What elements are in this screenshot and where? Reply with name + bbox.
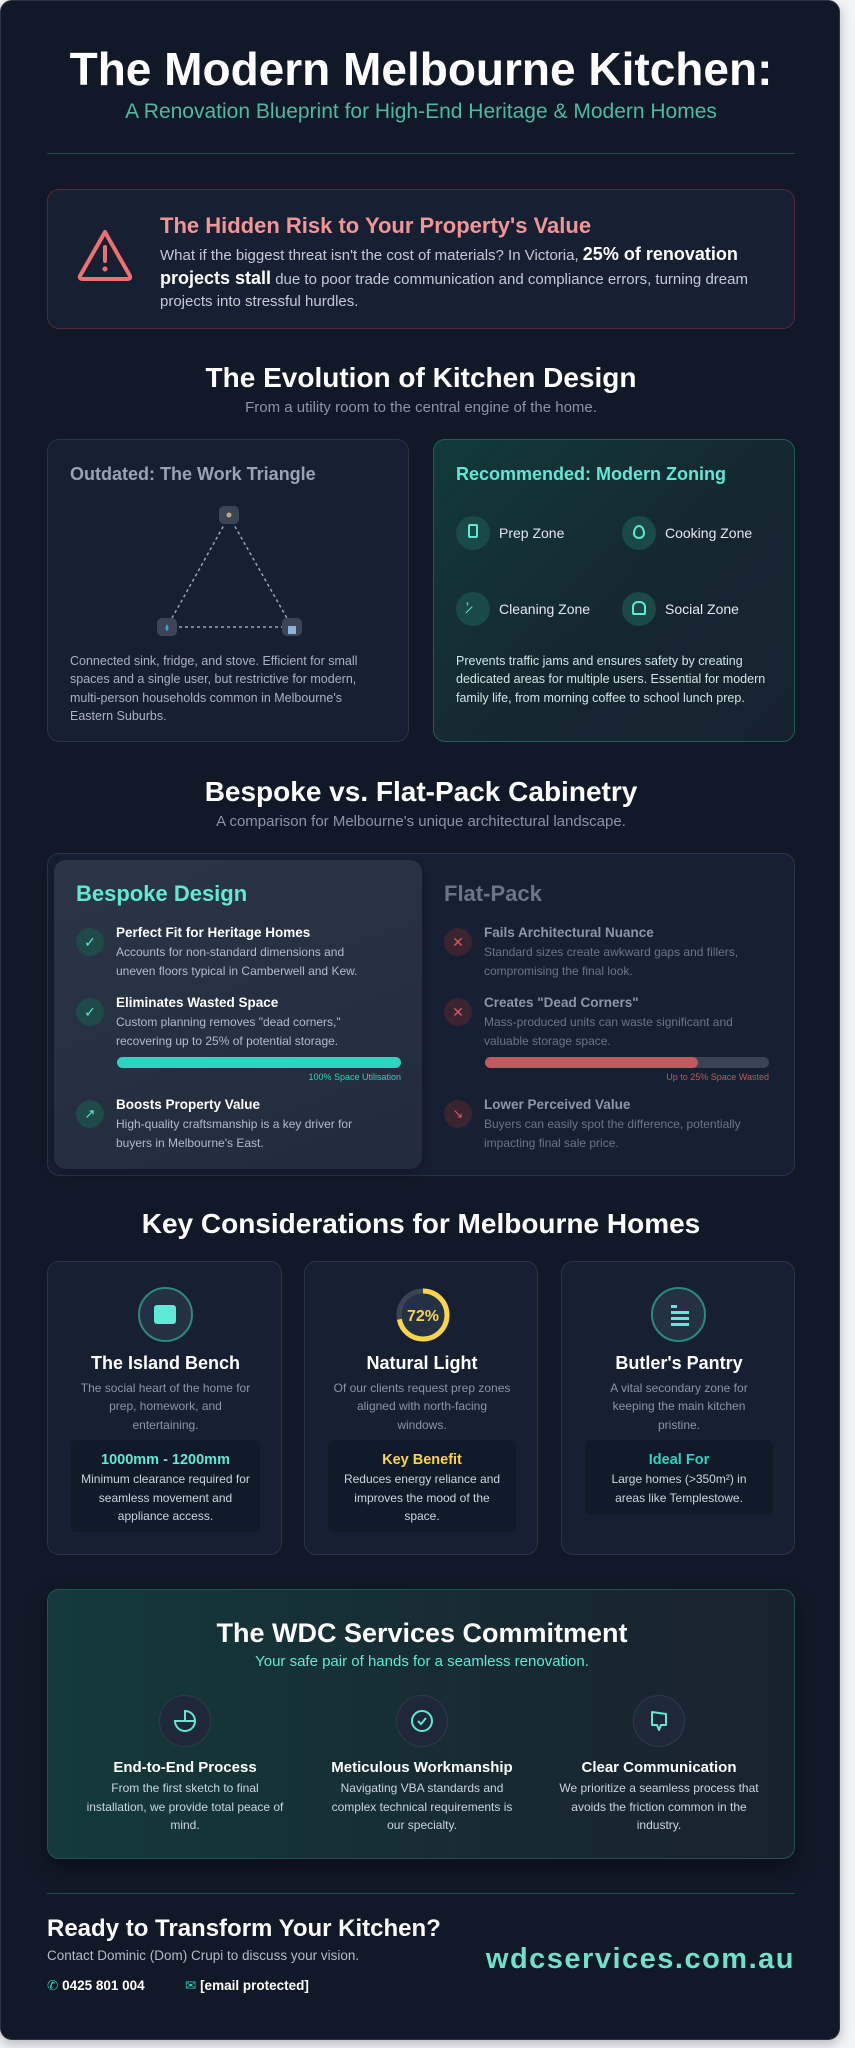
- item: boosts value: ↗: [85, 1106, 95, 1121]
- stat box: [71, 1440, 260, 1532]
- pillar: end-to-end: From the first sketch to final installation, we provide total peace of mind.: [87, 1781, 283, 1832]
- description: The social heart of the home for prep, homework, and entertaining.: [81, 1381, 250, 1432]
- risk heading: The Hidden Risk to Your Property's Value: [160, 213, 591, 238]
- item: eliminates wasted space: [76, 995, 401, 1082]
- item: dead corners: Mass-produced units can waste significant and valuable storage space.: [484, 1015, 733, 1048]
- donut: 72%: [396, 1288, 450, 1342]
- zoning heading: Recommended: Modern Zoning: [456, 464, 726, 484]
- triangle diagram: [157, 506, 302, 636]
- subtitle: A Renovation Blueprint for High-End Heritage & Modern Homes: [125, 100, 717, 123]
- stat box: 1000mm - 1200mm: [101, 1452, 230, 1468]
- item: eliminates wasted space: Eliminates Wasted Space: [116, 995, 278, 1010]
- benefit box: Key Benefit: [382, 1452, 462, 1468]
- item: boosts value: Boosts Property Value: [116, 1097, 260, 1112]
- icon: pantry: [651, 1287, 706, 1342]
- heading: key considerations: Key Considerations for Melbourne Homes: [142, 1208, 700, 1239]
- item: lower value: [444, 1097, 741, 1150]
- item: perfect fit: Perfect Fit for Heritage Homes: [116, 925, 310, 940]
- card: natural light: [304, 1261, 538, 1555]
- email: ✉ [email protected]: [185, 1978, 309, 1993]
- pillar: end-to-end: End-to-End Process: [113, 1759, 257, 1776]
- card: butler's pantry: [561, 1261, 795, 1555]
- icon: warning triangle: [78, 230, 132, 281]
- description: A vital secondary zone for keeping the main kitchen pristine.: [610, 1381, 748, 1432]
- item: eliminates wasted space: Custom planning removes "dead corners," recovering up to 25% of potential storage.: [116, 1015, 341, 1048]
- item: dead corners: [444, 995, 769, 1082]
- panel: modern zoning: [433, 439, 795, 742]
- commitment title: The WDC Services Commitment: [216, 1618, 628, 1648]
- column: flat-pack: [444, 881, 769, 1150]
- zone: social: [622, 592, 739, 626]
- pillar: communication: We prioritize a seamless process that avoids the friction common in the industry.: [559, 1781, 759, 1832]
- pillar: workmanship: Meticulous Workmanship: [331, 1759, 513, 1776]
- item: perfect fit: [76, 925, 357, 978]
- panel: outdated work triangle: [47, 439, 409, 742]
- footer CTA: [47, 1915, 795, 1993]
- benefit box: Reduces energy reliance and improves the mood of the space.: [344, 1472, 500, 1523]
- CTA contact line: Contact Dominic (Dom) Crupi to discuss your vision.: [47, 1948, 359, 1963]
- item: lower value: ↘: [453, 1106, 463, 1121]
- zoning text: Prevents traffic jams and ensures safety by creating dedicated areas for multiple users. Essential for modern family life, from morning coffee to school lunch prep.: [456, 654, 765, 705]
- ideal-for box: [585, 1440, 773, 1515]
- commitment subtitle: Your safe pair of hands for a seamless renovation.: [255, 1653, 589, 1670]
- pillar: end-to-end: [87, 1695, 284, 1832]
- ideal-for box: Ideal For: [649, 1452, 709, 1468]
- item: lower value: Buyers can easily spot the difference, potentially impacting final sale price.: [484, 1117, 741, 1150]
- pillar: workmanship: [331, 1695, 513, 1832]
- pillar: communication: Clear Communication: [581, 1759, 737, 1776]
- zone: prep: Prep Zone: [499, 525, 564, 541]
- item: boosts value: [76, 1097, 352, 1150]
- card: island bench: [47, 1261, 282, 1555]
- subheading: evolution: From a utility room to the central engine of the home.: [245, 399, 597, 416]
- icon: island: [138, 1287, 193, 1342]
- item: dead corners: ✕: [452, 1004, 464, 1020]
- subheading: cabinetry: A comparison for Melbourne's unique architectural landscape.: [216, 813, 626, 830]
- risk body: What if the biggest threat isn't the cost of materials? In Victoria, 25% of renovation projects stall due to poor trade communication and compliance errors, turning dream projects into stressful hurdles.: [160, 244, 748, 310]
- item: fails nuance: [444, 925, 738, 978]
- item: boosts value: High-quality craftsmanship is a key driver for buyers in Melbourne's East.: [116, 1117, 352, 1150]
- panel: hidden risk: [47, 189, 795, 329]
- outdated text: Connected sink, fridge, and stove. Efficient for small spaces and a single user, but restrictive for modern, multi-person households common in Melbourne's Eastern Suburbs.: [70, 654, 357, 723]
- zone: cleaning: ʼ̷: [466, 600, 469, 616]
- flat-pack heading: Flat-Pack: [444, 881, 542, 906]
- item: eliminates wasted space: ✓: [84, 1004, 96, 1020]
- title: The Island Bench: [91, 1353, 240, 1373]
- title: Butler's Pantry: [615, 1353, 743, 1373]
- item: dead corners: Up to 25% Space Wasted: [666, 1072, 769, 1082]
- zone: cooking: Cooking Zone: [665, 525, 752, 541]
- pillar: workmanship: Navigating VBA standards and complex technical requirements is our specialty.: [332, 1781, 512, 1832]
- stat box: Minimum clearance required for seamless movement and appliance access.: [81, 1472, 250, 1523]
- zone: social: Social Zone: [665, 601, 739, 617]
- title: Natural Light: [366, 1353, 478, 1373]
- outdated heading: Outdated: The Work Triangle: [70, 464, 316, 484]
- item: lower value: Lower Perceived Value: [484, 1097, 630, 1112]
- phone: ✆ 0425 801 004: [47, 1978, 145, 1993]
- item: fails nuance: ✕: [452, 934, 464, 950]
- item: fails nuance: Standard sizes create awkward gaps and fillers, compromising the final look.: [484, 945, 738, 978]
- zone: cleaning: [456, 592, 590, 626]
- description: Of our clients request prep zones aligned with north-facing windows.: [334, 1381, 510, 1432]
- bespoke heading: Bespoke Design: [76, 881, 247, 906]
- panel: WDC commitment: [47, 1589, 795, 1859]
- zone: prep: [456, 516, 564, 550]
- zone: cleaning: Cleaning Zone: [499, 601, 590, 617]
- ideal-for box: Large homes (>350m²) in areas like Templestowe.: [611, 1472, 747, 1504]
- benefit box: [328, 1440, 516, 1532]
- title: The Modern Melbourne Kitchen:: [70, 43, 772, 95]
- donut: 72%: 72%: [407, 1308, 439, 1325]
- column: bespoke: [54, 860, 422, 1169]
- item: perfect fit: ✓: [84, 934, 96, 950]
- website: wdcservices.com.au: [486, 1943, 795, 1975]
- bar: space utilisation: [117, 1057, 401, 1068]
- CTA heading: Ready to Transform Your Kitchen?: [47, 1915, 441, 1942]
- heading: cabinetry: Bespoke vs. Flat-Pack Cabinetry: [205, 776, 637, 807]
- heading: evolution: The Evolution of Kitchen Design: [206, 362, 636, 393]
- zone: cooking: [622, 516, 752, 550]
- item: perfect fit: Accounts for non-standard dimensions and uneven floors typical in Camberwell and Kew.: [116, 945, 357, 978]
- item: eliminates wasted space: 100% Space Utilisation: [308, 1072, 401, 1082]
- pillar: communication: [559, 1695, 759, 1832]
- item: fails nuance: Fails Architectural Nuance: [484, 925, 654, 940]
- item: dead corners: Creates "Dead Corners": [484, 995, 639, 1010]
- bar: space wasted: [485, 1057, 769, 1068]
- panel: comparison: [47, 853, 795, 1176]
